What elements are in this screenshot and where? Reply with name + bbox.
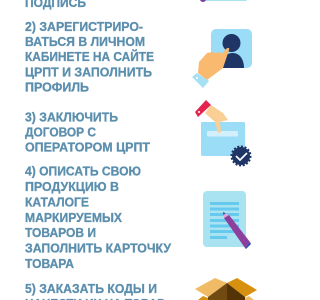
step 2 text: [25, 19, 154, 94]
icon: hand touching profile: [192, 29, 252, 88]
step 2 text: ПРОФИЛЬ: [25, 80, 89, 94]
icon: open cardboard box: [195, 278, 257, 300]
icon: signature card tail: [200, 0, 247, 2]
step 4 text: КАТАЛОГЕ: [25, 194, 89, 210]
step 3 text: [25, 110, 150, 154]
icon: document with pen: [203, 191, 251, 249]
step 4 text: ТОВАРА: [25, 256, 75, 271]
step 3 text: 3) ЗАКЛЮЧИТЬ: [25, 110, 118, 124]
step 3 text: ОПЕРАТОРОМ ЦРПТ: [25, 140, 150, 154]
step 3 text: ДОГОВОР С: [25, 124, 97, 140]
step 4 text: ЗАПОЛНИТЬ КАРТОЧКУ: [25, 240, 172, 256]
step 4 text: ПРОДУКЦИЮ В: [25, 179, 119, 194]
step 5 text: 5) ЗАКАЗАТЬ КОДЫ И: [25, 281, 157, 296]
step 4 text: [25, 164, 172, 271]
icon: hand placing document into folder: [195, 100, 250, 166]
step 4 text: 4) ОПИСАТЬ СВОЮ: [25, 164, 141, 178]
step 2 text: КАБИНЕТЕ НА САЙТЕ: [25, 49, 154, 64]
step 4 text: ТОВАРОВ И: [25, 225, 96, 240]
step 4 text: МАРКИРУЕМЫХ: [25, 210, 122, 225]
step 2 text: 2) ЗАРЕГИСТРИРО-: [25, 19, 143, 34]
step 2 text: ВАТЬСЯ В ЛИЧНОМ: [25, 34, 145, 49]
step 2 text: ЦРПТ И ЗАПОЛНИТЬ: [25, 64, 152, 80]
